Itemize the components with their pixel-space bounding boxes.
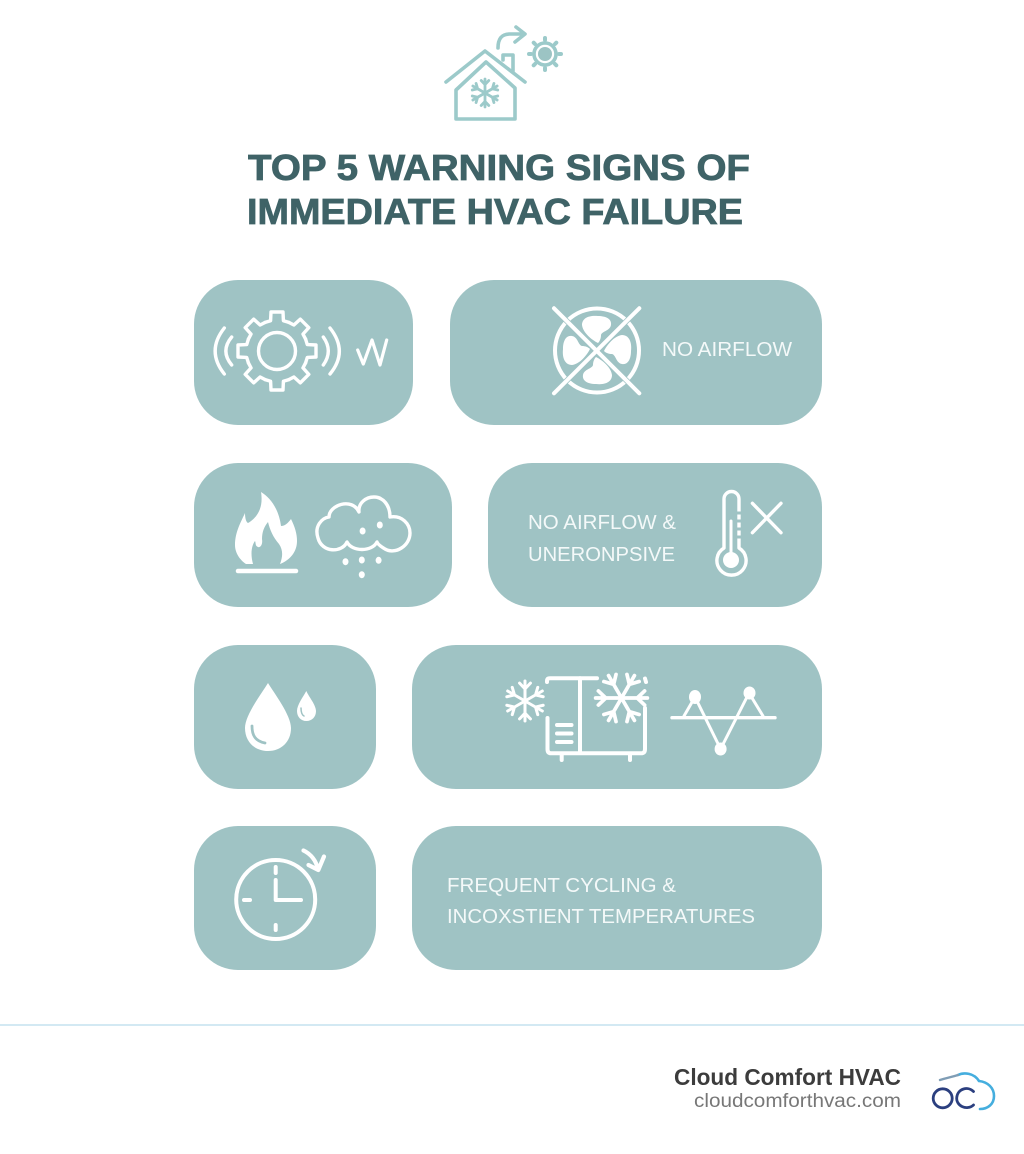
icon: outdoor unit xyxy=(547,678,646,760)
title: TOP 5 WARNING SIGNS OF xyxy=(248,147,750,188)
panel: burning smell and mold xyxy=(194,463,452,607)
panel: no airflow xyxy=(450,280,822,425)
icon: clock with arrow xyxy=(236,850,324,939)
icon: small water drop xyxy=(297,691,316,721)
panel: frequent cycling clock xyxy=(194,826,376,970)
label: frequent cycling and inconsistent temperatures xyxy=(447,875,755,928)
title xyxy=(247,147,750,232)
icon: noise squiggle xyxy=(358,340,387,365)
icon: large snowflake xyxy=(596,672,647,724)
panel: water leaks xyxy=(194,645,376,789)
icon: house with snowflake, arrow and sun xyxy=(446,27,561,119)
brand name: Cloud Comfort HVAC xyxy=(674,1064,901,1090)
footer brand xyxy=(674,1064,901,1112)
icon: small snowflake xyxy=(505,681,545,721)
title: IMMEDIATE HVAC FAILURE xyxy=(247,191,743,232)
icon: cloud with particles xyxy=(317,497,410,578)
panel: unresponsive thermostat xyxy=(488,463,822,607)
label: no airflow and unresponsive: UNERONPSIVE xyxy=(528,544,675,566)
icon: vibrating gear xyxy=(215,312,339,390)
label: no airflow and unresponsive: NO AIRFLOW & xyxy=(528,512,677,534)
icon: flame xyxy=(235,492,297,571)
icon: large water drop xyxy=(245,683,291,751)
brand website: cloudcomforthvac.com xyxy=(694,1091,901,1112)
label: no airflow: NO AIRFLOW xyxy=(662,339,792,361)
panel: ice on unit and temperature swings xyxy=(412,645,822,789)
label: frequent cycling and inconsistent temperatures: FREQUENT CYCLING & xyxy=(447,875,677,897)
icon: thermometer with cross xyxy=(717,492,781,575)
logo: cloud with OC xyxy=(933,1073,994,1109)
label: frequent cycling and inconsistent temperatures: INCOXSTIENT TEMPERATURES xyxy=(447,906,755,928)
icon: temperature wave xyxy=(672,686,775,756)
icon: crossed-out fan xyxy=(554,308,639,393)
label: no airflow and unresponsive xyxy=(528,512,677,566)
panel: frequent cycling text xyxy=(412,826,822,970)
panel: strange noises xyxy=(194,280,413,425)
